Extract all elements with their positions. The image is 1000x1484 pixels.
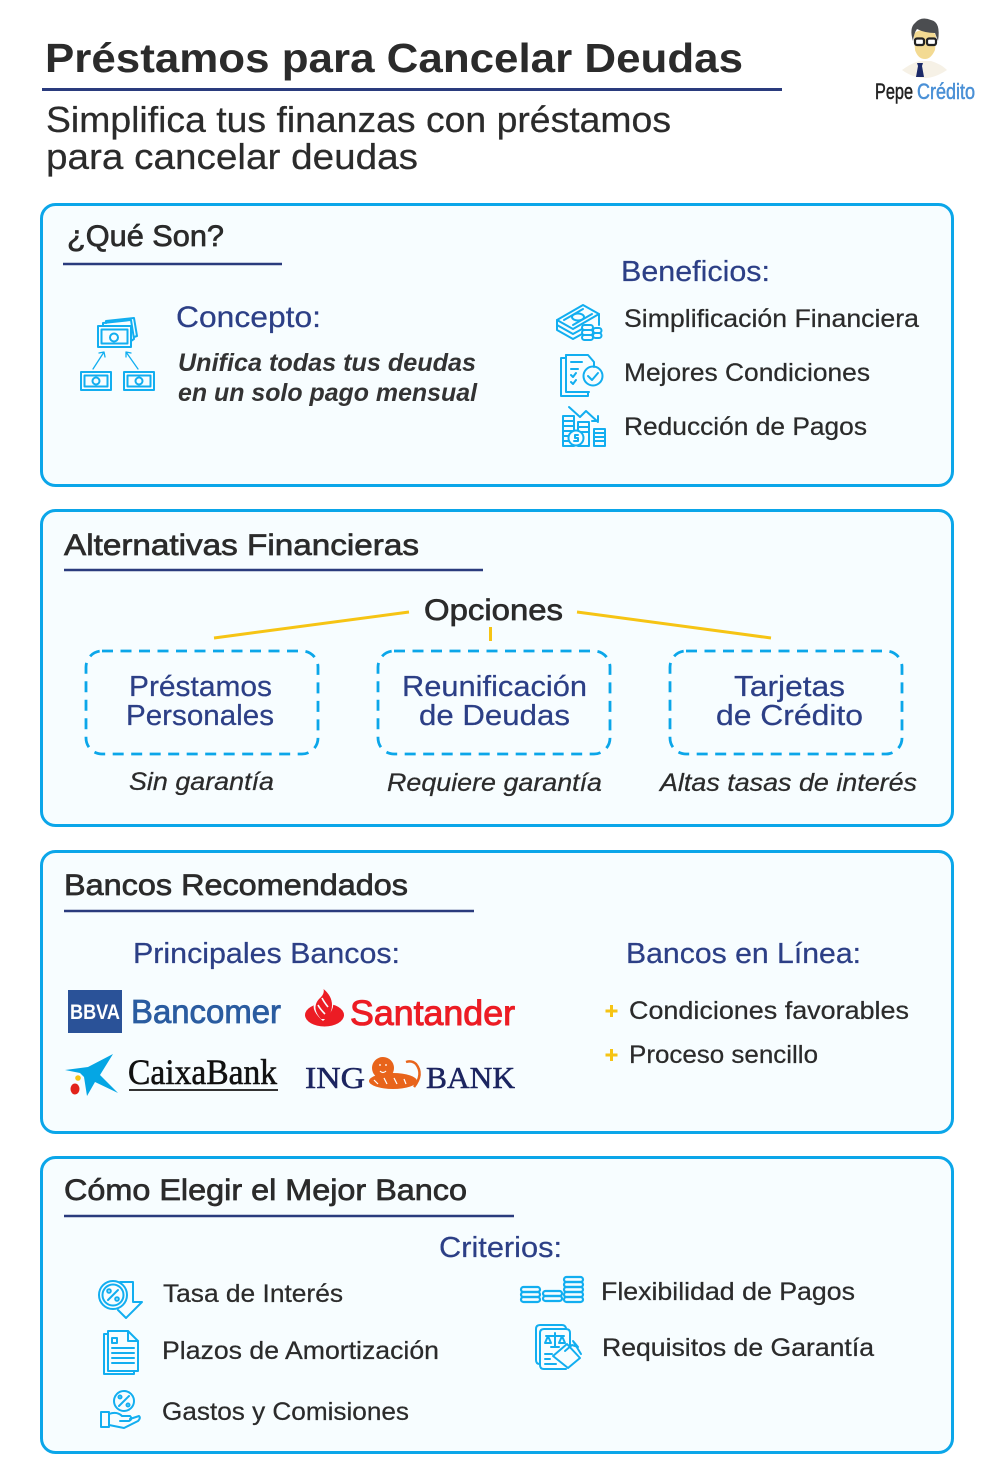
- option: Préstamos Personales: Personales: [126, 700, 274, 732]
- panel: ¿Qué Son?: [42, 204, 952, 486]
- icon: hand with percent: [101, 1391, 140, 1428]
- panel: Bancos Recomendados: [42, 852, 952, 1132]
- panel: Cómo Elegir el Mejor Banco: [42, 1158, 952, 1452]
- logo: ING Bank: ING: [305, 1060, 365, 1095]
- concept text: Unifica todas tus deudas: [178, 349, 476, 377]
- item: Requisitos de Garantía: Requisitos de Garantía: [602, 1334, 874, 1362]
- item: Tasa de Interés: Tasa de Interés: [163, 1280, 343, 1308]
- item: Plazos de Amortización: Plazos de Amortización: [162, 1337, 439, 1365]
- logo: CaixaBank: CaixaBank: [128, 1052, 277, 1092]
- option: Reunificación de Deudas: Reunificación: [402, 671, 587, 703]
- subtitle: para cancelar deudas: [46, 136, 418, 177]
- icon: contract handshake: [536, 1325, 581, 1369]
- logo: ING Bank: [305, 1057, 516, 1095]
- icon: bills merging: [81, 318, 154, 390]
- option: Tarjetas de Crédito: Altas tasas de interés: [658, 769, 917, 797]
- option: Reunificación de Deudas: de Deudas: [419, 700, 570, 732]
- subtitle: [46, 99, 671, 177]
- option: Préstamos Personales: Sin garantía: [129, 768, 274, 796]
- option: Tarjetas de Crédito: [658, 651, 917, 797]
- heading: Bancos Recomendados: Bancos Recomendados: [64, 869, 408, 902]
- option: Tarjetas de Crédito: Tarjetas: [734, 671, 845, 703]
- concept text: en un solo pago mensual: [178, 379, 478, 407]
- heading: Beneficios: Beneficios:: [621, 256, 770, 288]
- logo: Pepe Crédito: [875, 19, 975, 104]
- icon: document: [104, 1331, 138, 1374]
- item: Condiciones favorables: Condiciones favorables: [629, 997, 909, 1025]
- item: Simplificación Financiera: Simplificación Financiera: [624, 305, 919, 333]
- logo: BBVA Bancomer: BBVA: [70, 1001, 120, 1024]
- icon: percent down: [99, 1281, 142, 1318]
- icon: coin bars: [521, 1277, 583, 1302]
- option: Reunificación de Deudas: Requiere garantía: [387, 769, 602, 797]
- option: Reunificación de Deudas: [378, 651, 610, 797]
- option: Préstamos Personales: Préstamos: [129, 671, 272, 703]
- heading: Opciones: Opciones: [424, 594, 563, 627]
- icon: checked document: [561, 355, 602, 396]
- item: Gastos y Comisiones: Gastos y Comisiones: [162, 1398, 409, 1426]
- option: Préstamos Personales: [86, 651, 318, 796]
- heading: Cómo Elegir el Mejor Banco: Cómo Elegir el Mejor Banco: [64, 1174, 467, 1207]
- heading: Bancos en Línea: Bancos en Línea:: [626, 938, 861, 970]
- item: Flexibilidad de Pagos: Flexibilidad de Pagos: [601, 1278, 855, 1306]
- subtitle: Simplifica tus finanzas con préstamos: [46, 99, 671, 140]
- heading: Alternativas Financieras: Alternativas Financieras: [64, 529, 419, 562]
- logo: Santander: [303, 989, 515, 1033]
- title: Préstamos para Cancelar Deudas: [45, 35, 743, 81]
- connector lines: [214, 612, 771, 641]
- heading: ¿Qué Son?: ¿Qué Son?: [67, 220, 224, 253]
- icon: money stack: [557, 305, 602, 340]
- heading: Criterios: Criterios:: [439, 1232, 562, 1264]
- item: Reducción de Pagos: Reducción de Pagos: [624, 413, 867, 441]
- icon: falling coins chart: [563, 407, 605, 446]
- option: Tarjetas de Crédito: de Crédito: [716, 700, 863, 732]
- logo: Pepe Crédito: Crédito: [917, 79, 975, 104]
- logo: Santander: Santander: [350, 994, 515, 1033]
- concept text: [176, 301, 478, 407]
- panel: Alternativas Financieras: [42, 510, 952, 826]
- logo: BBVA Bancomer: [68, 990, 281, 1033]
- logo: Pepe Crédito: Pepe: [875, 79, 913, 104]
- logo: CaixaBank: [65, 1052, 278, 1096]
- item: Proceso sencillo: Proceso sencillo: [629, 1041, 818, 1069]
- item: Mejores Condiciones: Mejores Condiciones: [624, 359, 870, 387]
- logo: ING Bank: BANK: [426, 1060, 516, 1095]
- heading: Principales Bancos: Principales Bancos:: [133, 938, 400, 970]
- logo: BBVA Bancomer: Bancomer: [131, 993, 281, 1030]
- concept text: Concepto:: [176, 301, 321, 334]
